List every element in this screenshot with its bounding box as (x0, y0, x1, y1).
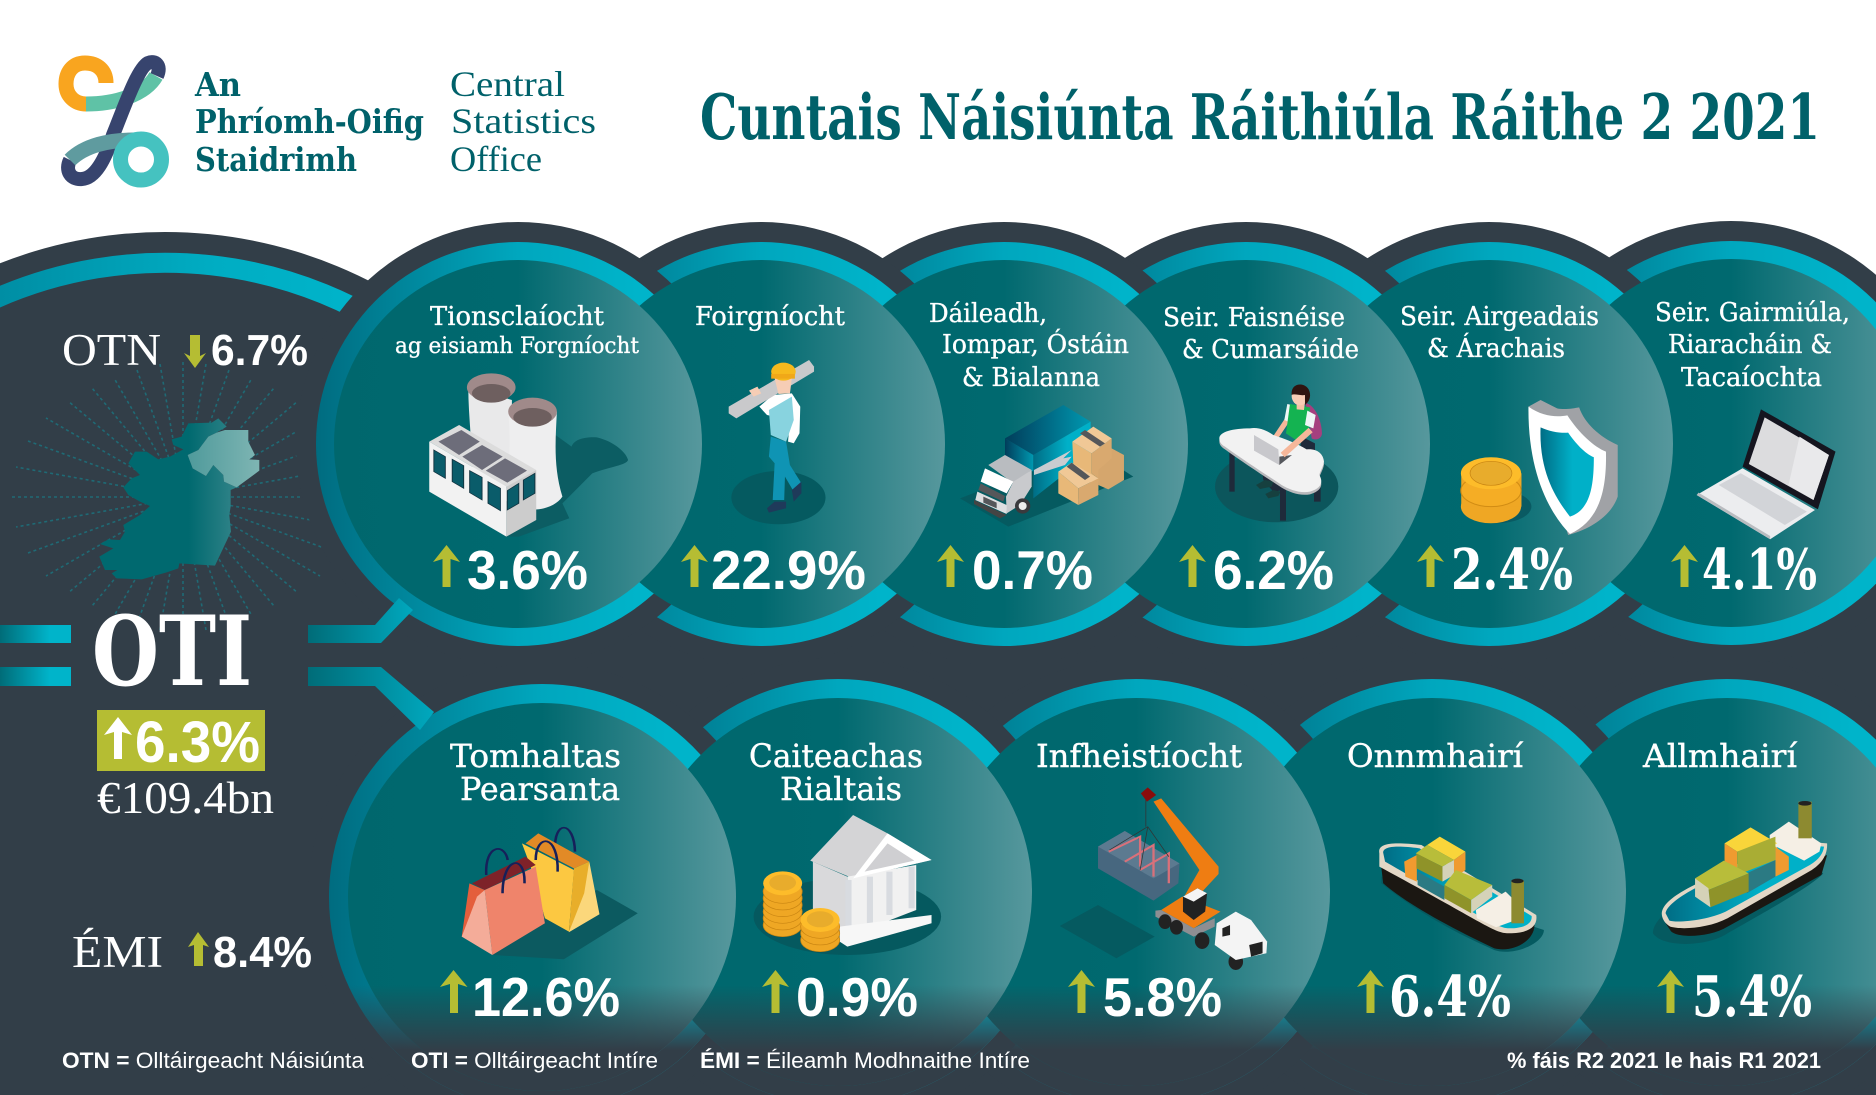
logo wordmark English: Central (450, 64, 565, 104)
icon: bank and coins (754, 815, 941, 955)
panel: Tomhaltas Pearsanta (348, 703, 736, 1091)
logo (66, 62, 162, 180)
heading (450, 737, 621, 808)
rings: top row (296, 221, 1876, 666)
heading (749, 737, 923, 808)
logo wordmark English (450, 64, 596, 179)
value: 3.6% (467, 539, 588, 601)
value: 12.6% (472, 966, 620, 1028)
heading: & Árachais (1427, 332, 1565, 364)
logo wordmark English: Statistics (451, 101, 596, 141)
logo wordmark Irish: Staidrimh (195, 140, 357, 179)
value: 0.9% (796, 966, 918, 1028)
heading: Seir. Gairmiúla, (1655, 298, 1850, 328)
value: 6.2% (1213, 539, 1334, 601)
icon: ship (1653, 801, 1827, 944)
heading: Tacaíochta (1681, 363, 1822, 393)
heading: Tionsclaíocht (430, 302, 605, 332)
ÉMI stat: ÉMI (72, 927, 163, 977)
rings: bottom row (308, 658, 1876, 1095)
OTI amount: €109.4bn (97, 773, 274, 823)
value: 22.9% (711, 539, 866, 601)
heading: Caiteachas (749, 737, 923, 775)
OTI growth value: 6.3% (135, 710, 260, 775)
panel: Seir. Airgeadais (1305, 260, 1673, 628)
heading (1163, 303, 1359, 365)
value (1417, 537, 1573, 603)
heading: ag eisiamh Forgníocht (395, 334, 639, 359)
connector bars (0, 598, 434, 730)
heading: Seir. Faisnéise (1163, 303, 1345, 333)
icon: construction worker (729, 360, 826, 524)
footer legend: OTN: OTN = Olltáirgeacht Náisiúnta (62, 1048, 365, 1073)
heading: & Cumarsáide (1182, 335, 1359, 365)
panel: Allmhairí (1533, 698, 1876, 1086)
panel: Caiteachas Rialtais (644, 698, 1032, 1086)
footer legend: ÉMI: ÉMI = Éileamh Modhnaithe Intíre (700, 1048, 1030, 1073)
heading: Infheistíocht (1036, 737, 1242, 775)
value (1671, 537, 1817, 603)
OTN stat (62, 325, 308, 375)
logo wordmark Irish: An (194, 65, 241, 104)
value: 5.4% (1692, 964, 1812, 1030)
left arc (0, 263, 420, 349)
icon: crane (1060, 787, 1267, 970)
heading: Rialtais (780, 770, 902, 808)
logo wordmark English: Office (450, 139, 542, 179)
logo wordmark Irish (194, 65, 424, 179)
OTN stat: OTN (62, 325, 161, 375)
heading: & Bialanna (962, 363, 1100, 393)
heading: Dáileadh, (929, 299, 1047, 329)
heading (1655, 298, 1850, 393)
ÉMI stat: 8.4% (213, 928, 312, 977)
heading: Seir. Airgeadais (1400, 302, 1599, 332)
heading: Onnmhairí (1347, 737, 1524, 775)
icon: person at desk (1215, 385, 1338, 522)
value: 6.4% (1389, 964, 1511, 1030)
footer note: % fáis R2 2021 le hais R1 2021 (1507, 1048, 1821, 1073)
value (1657, 964, 1812, 1030)
footer legend: OTI: OTI = Olltáirgeacht Intíre (411, 1048, 658, 1073)
OTI heading: OTI (92, 595, 252, 708)
icon: laptop (1697, 409, 1836, 539)
icon: shopping bags (462, 828, 638, 959)
heading: Iompar, Óstáin (942, 328, 1129, 360)
panel: Seir. Faisnéise (1062, 260, 1430, 628)
value: 0.7% (972, 539, 1093, 601)
value: 2.4% (1451, 537, 1573, 603)
heading: Foirgníocht (695, 302, 846, 332)
heading (395, 302, 639, 359)
value: 4.1% (1702, 537, 1817, 603)
panel: Onnmhairí (1238, 698, 1626, 1086)
panel: Foirgníocht (577, 260, 945, 628)
map of Ireland (99, 418, 259, 579)
rays around map (11, 362, 355, 632)
panel: Infheistíocht (942, 698, 1330, 1086)
logo wordmark Irish: Phríomh-Oifig (195, 102, 424, 141)
heading: Tomhaltas (450, 737, 621, 775)
icon: ship (1379, 837, 1544, 952)
heading: Pearsanta (460, 770, 620, 808)
panel: Seir. Gairmiúla (1547, 259, 1876, 627)
heading: Allmhairí (1642, 737, 1798, 775)
icon: truck and boxes (960, 405, 1133, 527)
icon: factory (429, 373, 628, 537)
heading (1400, 302, 1599, 364)
heading: Riaracháin & (1668, 330, 1832, 360)
value (1357, 964, 1511, 1030)
panel: Tionsclaíocht (334, 260, 702, 628)
icon: coins and shield (1461, 400, 1618, 535)
heading (929, 299, 1129, 393)
ÉMI stat (72, 927, 312, 977)
OTN stat: 6.7% (211, 326, 308, 375)
panel: Dáileadh (820, 260, 1188, 628)
value: 5.8% (1103, 966, 1222, 1028)
dark background (0, 232, 1876, 1095)
